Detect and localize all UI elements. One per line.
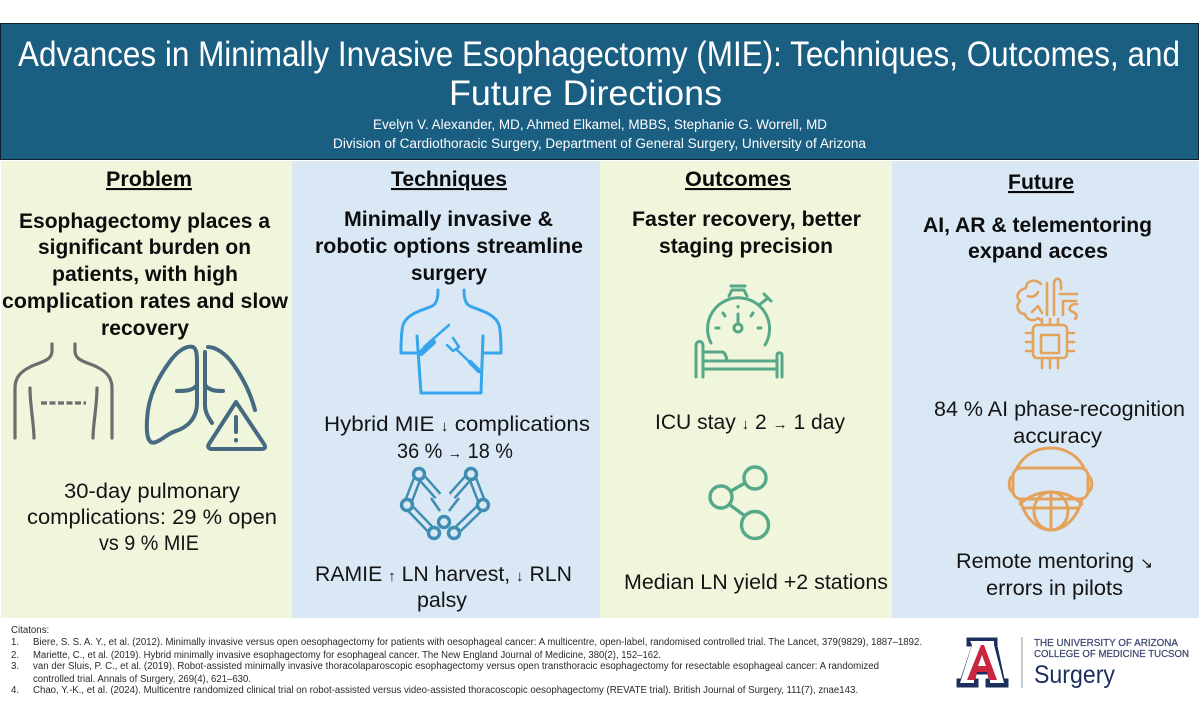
statistic: hybrid MIE: Hybrid MIE ↓ complications [324,413,590,436]
logo: University of Arizona College of Medicine Tucson Surgery [957,637,1189,689]
citations: Chao, Y.-K., et al. (2024). Multicentre randomized clinical trial on robot-assisted versus video-assisted thoracoscopic oesophagectomy (REVATE trial). British Journal of Surgery, 111(7), znae143. [33,685,858,696]
statistic: hybrid MIE [324,413,590,463]
citations: 3. [11,661,19,672]
outcomes statement [632,208,861,258]
icon: brain and chip [1018,279,1077,368]
citations: 1. [11,637,19,648]
heading: problem: Problem [106,168,192,191]
future statement: expand acces [968,240,1108,263]
statistic: LN yield: Median LN yield +2 stations [624,571,888,594]
techniques statement: surgery [411,262,487,285]
panel: techniques [292,161,600,618]
statistic: RAMIE: RAMIE ↑ LN harvest, ↓ RLN [315,563,572,586]
statistic: remote mentoring: errors in pilots [986,577,1123,600]
statistic: RAMIE [315,563,572,612]
authors and affiliation [333,117,866,151]
outcomes statement: staging precision [659,235,833,258]
logo text: THE UNIVERSITY OF ARIZONA [1034,637,1178,649]
icon: lungs with warning triangle [147,347,265,449]
problem statement: patients, with high [52,263,238,286]
citations: Citatons: [11,625,49,636]
statistic: AI accuracy: 84 % AI phase-recognition [934,398,1185,421]
logo text: COLLEGE OF MEDICINE TUCSON [1034,648,1189,660]
icon: stopwatch with bed [696,286,782,377]
icon: block A [957,638,1008,687]
header banner [0,24,1198,160]
citations: controlled trial. Annals of Surgery, 269(4), 621–630. [33,674,251,685]
panel: future [892,161,1199,618]
statistic: pulmonary complications: 30-day pulmonary [64,480,241,503]
logo text: Surgery [1034,661,1115,689]
future statement: AI, AR & telementoring [923,214,1152,237]
citations: van der Sluis, P. C., et al. (2019). Robot-assisted minimally invasive thoracolaparoscopic esophagectomy versus open transthoracic esophagectomy for resectable esophageal cancer: A randomized [33,661,879,672]
techniques statement: Minimally invasive & [344,208,553,231]
problem statement: complication rates and slow [2,290,289,313]
icon: robotic arms [402,468,488,538]
heading: techniques: Techniques [391,168,507,191]
statistic: AI accuracy [934,398,1185,448]
citations: 4. [11,685,19,696]
citations: Biere, S. S. A. Y., et al. (2012). Minimally invasive versus open oesophagectomy for patients with oesophageal cancer: A multicentre, open-label, randomised controlled trial. The Lancet, 379(9829), 1887–1892. [33,637,922,648]
statistic: ICU stay: ICU stay ↓ 2 → 1 day [655,411,845,434]
panel: problem [1,161,292,618]
icon: network nodes [710,467,768,538]
problem statement: significant burden on [38,236,251,259]
statistic: pulmonary complications: vs 9 % MIE [99,532,199,555]
citations: 2. [11,650,19,661]
techniques statement [315,208,583,285]
authors and affiliation: Division of Cardiothoracic Surgery, Department of General Surgery, University of Arizona [333,136,866,151]
techniques statement: robotic options streamline [315,235,583,258]
citations [11,625,922,696]
statistic: RAMIE: palsy [417,589,468,612]
title [18,35,1180,113]
statistic: pulmonary complications [27,480,277,555]
statistic: AI accuracy: accuracy [1013,425,1103,448]
heading: future: Future [1008,171,1074,194]
statistic: remote mentoring: Remote mentoring ↘ [956,550,1153,573]
heading: outcomes: Outcomes [685,168,791,191]
icon: torso with surgical instruments [401,290,501,393]
outcomes statement: Faster recovery, better [632,208,861,231]
statistic: hybrid MIE: 36 % → 18 % [397,440,513,463]
statistic: pulmonary complications: complications: 29 % open [27,506,277,529]
problem statement: Esophagectomy places a [19,210,270,233]
title: Future Directions [449,74,722,113]
citations: Mariette, C., et al. (2019). Hybrid minimally invasive esophagectomy for esophageal cancer. The New England Journal of Medicine, 380(2), 152–162. [33,650,661,661]
panel: outcomes [600,161,892,618]
icon: VR headset and globe [1009,448,1092,530]
problem statement [2,210,289,340]
future statement [923,214,1152,263]
logo text [1034,637,1189,689]
authors and affiliation: Evelyn V. Alexander, MD, Ahmed Elkamel, MBBS, Stephanie G. Worrell, MD [373,117,827,132]
statistic: remote mentoring [956,550,1153,600]
icon: chest with incision [15,344,112,438]
problem statement: recovery [101,317,189,340]
